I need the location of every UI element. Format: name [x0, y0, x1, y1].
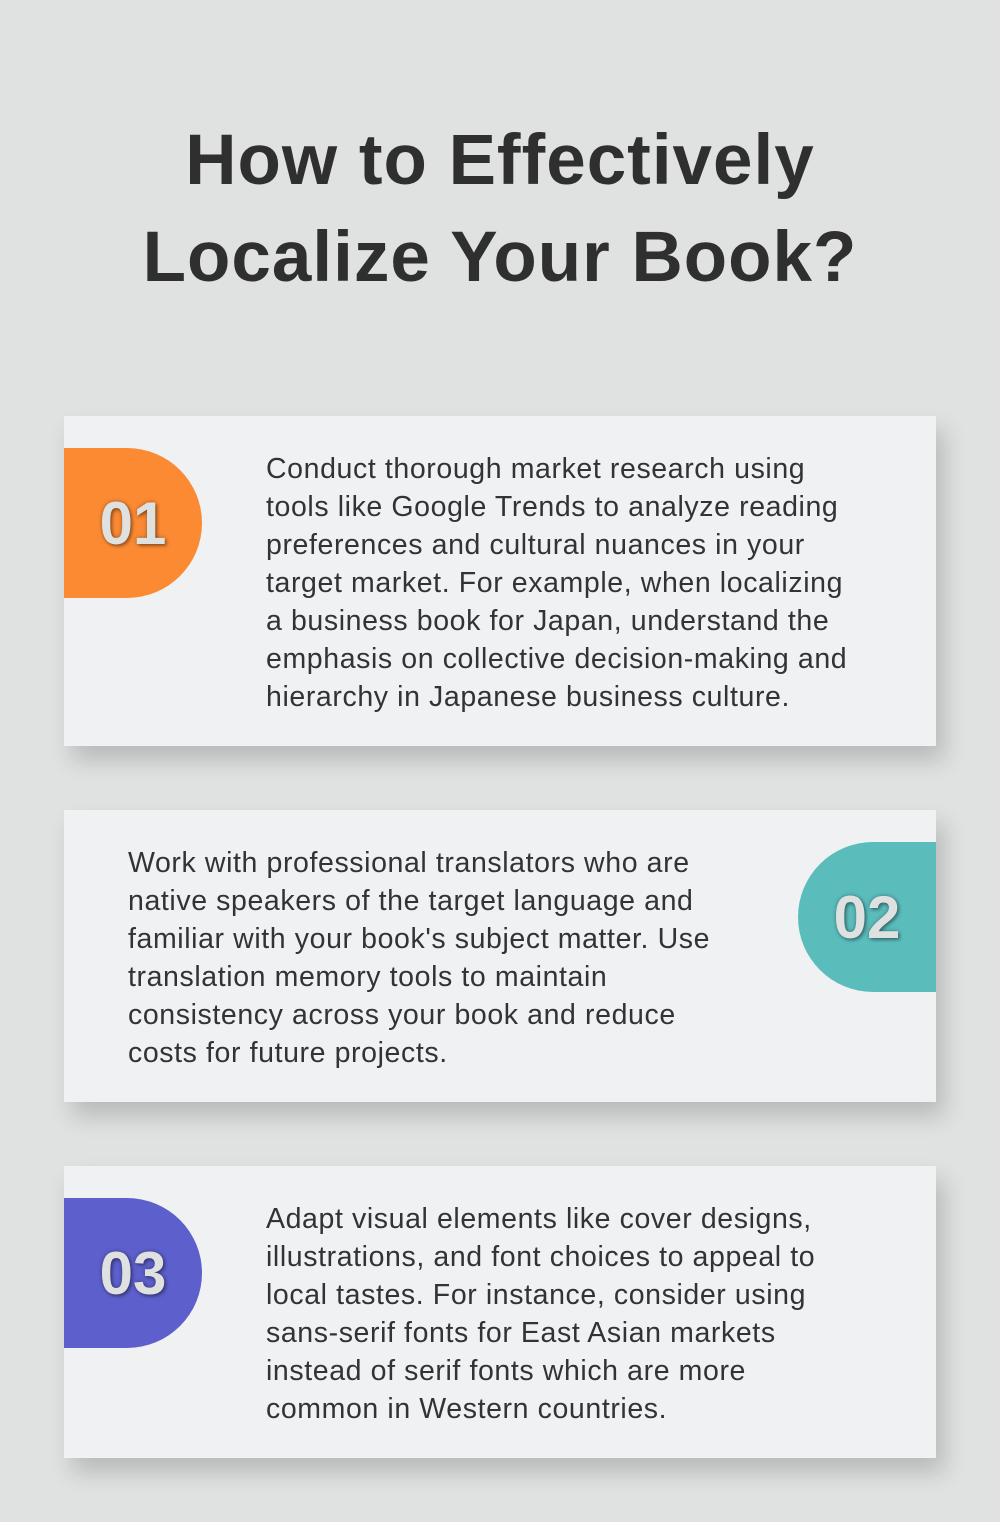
badge: 03: 03 — [100, 1240, 166, 1306]
text: step 2 — [128, 847, 710, 1069]
text: step 3: Adapt visual elements like cover designs, — [266, 1203, 812, 1235]
title: Localize Your Book? — [143, 218, 857, 297]
text: step 2: costs for future projects. — [128, 1037, 448, 1069]
text: step 3: sans-serif fonts for East Asian markets — [266, 1317, 776, 1349]
panel: step 1 — [64, 416, 936, 746]
badge: 02: 02 — [834, 884, 900, 950]
text: step 1: tools like Google Trends to analyze reading — [266, 491, 838, 523]
text: step 2: native speakers of the target language and — [128, 885, 694, 917]
panel: step 3 — [64, 1166, 936, 1458]
badge: 01 — [64, 448, 202, 598]
text: step 3: local tastes. For instance, consider using — [266, 1279, 806, 1311]
title: How to Effectively — [185, 121, 815, 200]
text: step 1 — [266, 453, 847, 713]
text: step 1: preferences and cultural nuances in your — [266, 529, 805, 561]
text: step 3: illustrations, and font choices to appeal to — [266, 1241, 815, 1273]
text: step 1: Conduct thorough market research using — [266, 453, 805, 485]
text: step 1: target market. For example, when localizing — [266, 567, 843, 599]
title — [143, 121, 857, 297]
text: step 3: common in Western countries. — [266, 1393, 667, 1425]
panel: step 2 — [64, 810, 936, 1102]
text: step 2: translation memory tools to maintain — [128, 961, 607, 993]
text: step 2: consistency across your book and reduce — [128, 999, 676, 1031]
text: step 2: Work with professional translators who are — [128, 847, 690, 879]
text: step 3 — [266, 1203, 815, 1425]
text: step 1: emphasis on collective decision-making and — [266, 643, 847, 675]
text: step 1: a business book for Japan, understand the — [266, 605, 829, 637]
text: step 1: hierarchy in Japanese business culture. — [266, 681, 790, 713]
badge: 03 — [64, 1198, 202, 1348]
text: step 2: familiar with your book's subject matter. Use — [128, 923, 710, 955]
badge: 02 — [798, 842, 936, 992]
badge: 01: 01 — [100, 490, 166, 556]
text: step 3: instead of serif fonts which are more — [266, 1355, 746, 1387]
